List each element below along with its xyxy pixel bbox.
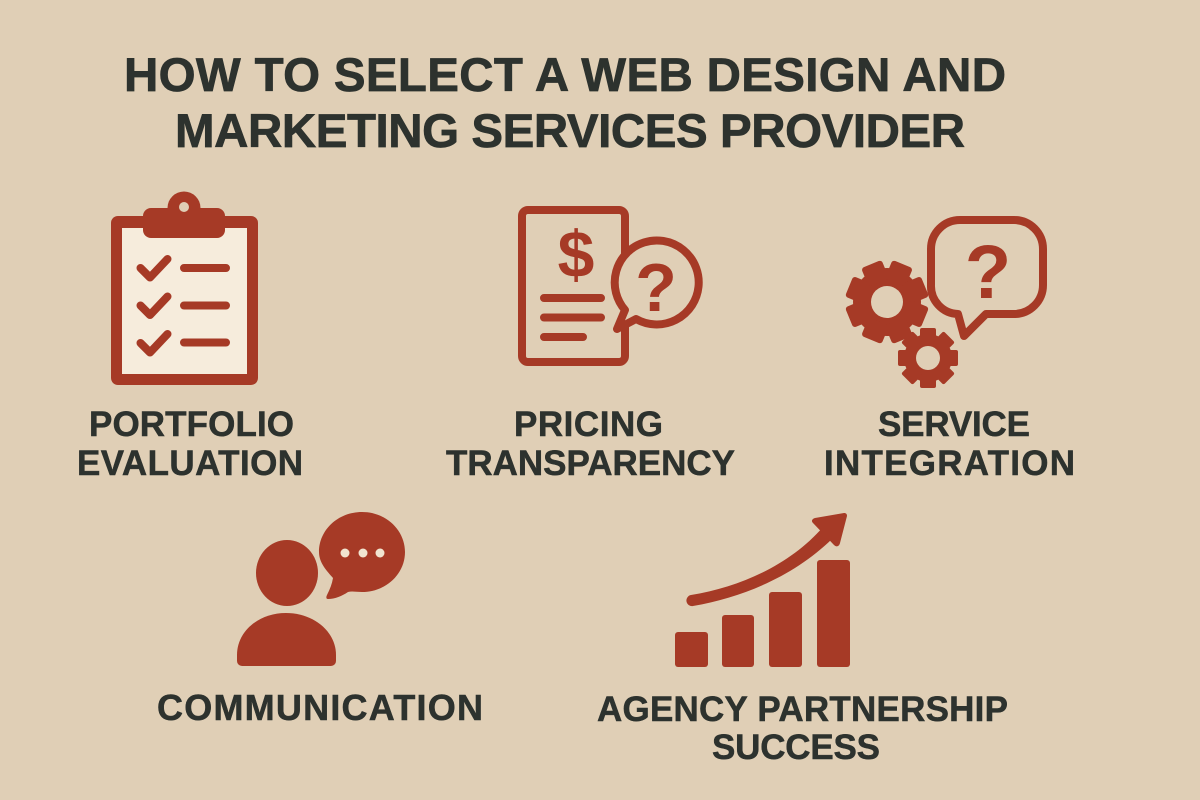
label: pricing transparency: [446, 405, 735, 483]
label: agency partnership success: AGENCY PARTNERSHIP: [597, 690, 1008, 729]
label: communication: COMMUNICATION: [157, 687, 483, 728]
title: MARKETING SERVICES PROVIDER: [175, 105, 965, 158]
label: portfolio evaluation: EVALUATION: [77, 444, 303, 483]
icon: growth bar chart with arrow: [675, 513, 850, 667]
label: service integration: INTEGRATION: [824, 444, 1075, 483]
icon: person with speech bubble: [237, 512, 405, 666]
label: service integration: SERVICE: [878, 405, 1030, 444]
icon: clipboard checklist: [111, 192, 258, 385]
icon: gears with question bubble: [845, 220, 1043, 388]
label: agency partnership success: SUCCESS: [712, 728, 880, 767]
icon: pricing document with question bubble: ?: [635, 250, 677, 326]
icon: pricing document with question bubble: [522, 210, 699, 362]
label: pricing transparency: PRICING: [514, 405, 663, 444]
icon: gears with question bubble: ?: [965, 230, 1011, 315]
title: HOW TO SELECT A WEB DESIGN AND: [124, 49, 1006, 102]
title: [124, 49, 1006, 158]
label: service integration: [824, 405, 1075, 483]
label: portfolio evaluation: [77, 405, 303, 483]
icon: pricing document with question bubble: $: [558, 217, 594, 291]
label: portfolio evaluation: PORTFOLIO: [89, 405, 294, 444]
label: pricing transparency: TRANSPARENCY: [446, 444, 735, 483]
label: agency partnership success: [597, 690, 1008, 767]
